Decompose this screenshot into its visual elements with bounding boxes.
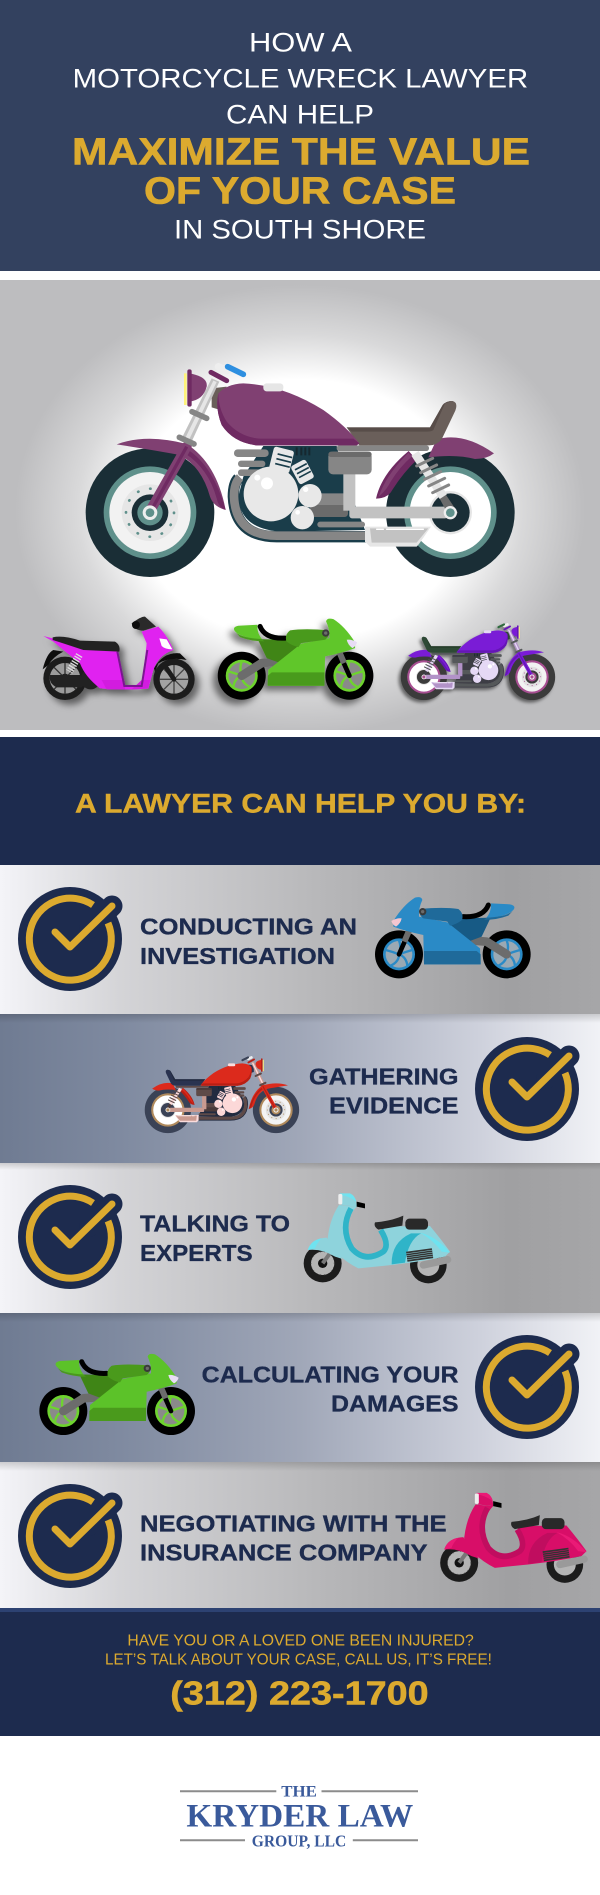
- row: negotiating with the insurance company: [0, 1462, 600, 1608]
- illustration: teal scooter: [304, 1193, 450, 1283]
- row text: GATHERING: [309, 1064, 458, 1090]
- phone number: (312) 223-1700: [170, 1675, 429, 1712]
- illustration: main purple motorcycle: [86, 367, 515, 577]
- row: gathering evidence: [0, 1014, 600, 1163]
- title text: OF YOUR CASE: [144, 170, 456, 212]
- logo: The Kryder Law Group, LLC: [180, 1784, 418, 1851]
- row text: CONDUCTING AN: [140, 914, 357, 940]
- title text: CAN HELP: [226, 100, 374, 130]
- icon: check mark: [475, 1037, 579, 1141]
- logo: The Kryder Law Group, LLC: KRYDER LAW: [186, 1799, 413, 1835]
- row text: [202, 1362, 459, 1417]
- icon: check mark: [18, 1185, 122, 1289]
- row: talking to experts: [0, 1163, 600, 1313]
- illustration: violet cruiser: [401, 624, 555, 700]
- section heading band: [0, 737, 600, 865]
- icon: check mark: [18, 887, 122, 991]
- logo: The Kryder Law Group, LLC: GROUP, LLC: [252, 1832, 346, 1851]
- illustration: green sport bike: [39, 1354, 195, 1435]
- row text: INVESTIGATION: [140, 943, 335, 969]
- row text: CALCULATING YOUR: [202, 1362, 459, 1388]
- row text: [140, 1211, 290, 1266]
- call to action text: HAVE YOU OR A LOVED ONE BEEN INJURED?: [127, 1632, 474, 1649]
- row text: NEGOTIATING WITH THE: [140, 1511, 447, 1537]
- icon: check mark: [18, 1484, 122, 1588]
- title text: MOTORCYCLE WRECK LAWYER: [73, 64, 528, 94]
- call to action text: LET’S TALK ABOUT YOUR CASE, CALL US, IT’S FREE!: [105, 1651, 492, 1668]
- illustration: red cruiser: [145, 1057, 299, 1133]
- row text: EVIDENCE: [329, 1093, 458, 1119]
- title text: IN SOUTH SHORE: [174, 215, 426, 245]
- title text: [72, 28, 530, 245]
- illustration: pink scooter: [440, 1493, 586, 1583]
- illustration: blue sport bike: [375, 897, 531, 978]
- row text: DAMAGES: [331, 1391, 458, 1417]
- title text: HOW A: [249, 28, 352, 58]
- row text: [309, 1064, 458, 1119]
- heading text: A LAWYER CAN HELP YOU BY:: [75, 788, 526, 818]
- icon: check mark: [475, 1335, 579, 1439]
- call to action text: [105, 1632, 492, 1668]
- row: calculating your damages: [0, 1313, 600, 1462]
- hero panel: motorcycles: [0, 280, 600, 730]
- header panel: [0, 0, 600, 271]
- row text: [140, 1511, 447, 1566]
- illustration: magenta scooter: [43, 617, 195, 700]
- call to action panel: [0, 1608, 600, 1736]
- row: conducting an investigation: [0, 865, 600, 1014]
- logo: The Kryder Law Group, LLC: THE: [281, 1784, 317, 1801]
- title text: MAXIMIZE THE VALUE: [72, 130, 530, 172]
- row text: EXPERTS: [140, 1240, 253, 1266]
- illustration: green sport bike: [218, 619, 373, 700]
- row text: [140, 914, 357, 969]
- row text: INSURANCE COMPANY: [140, 1540, 428, 1566]
- row text: TALKING TO: [140, 1211, 290, 1237]
